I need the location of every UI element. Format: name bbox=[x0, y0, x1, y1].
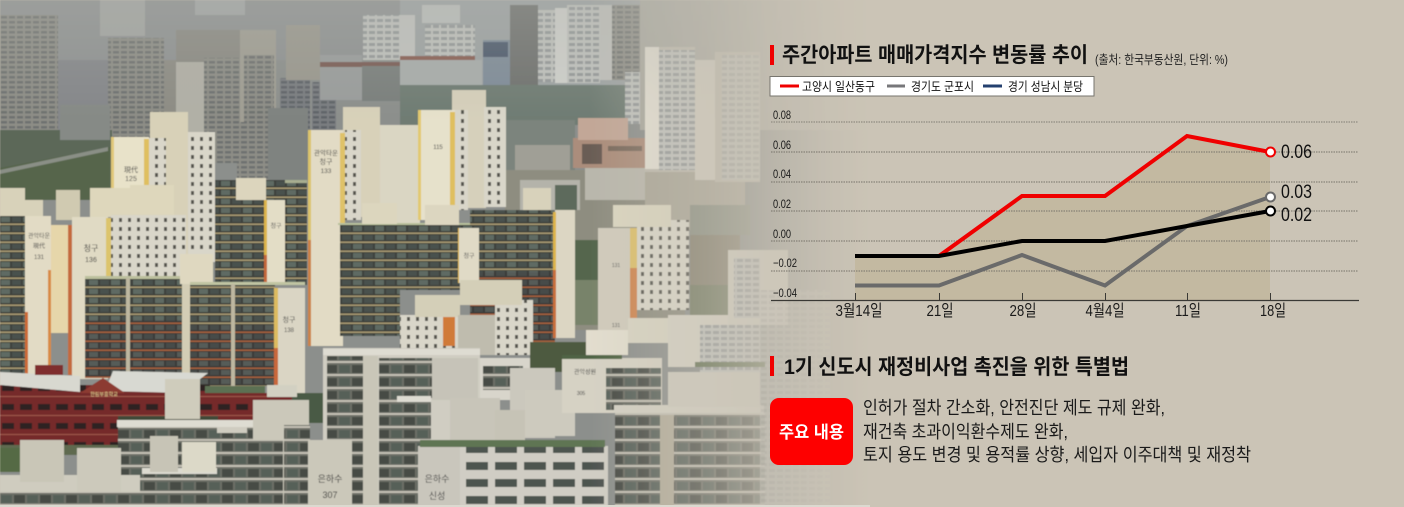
cream tower block 133: 133 bbox=[321, 168, 332, 175]
tower block 131: 131 bbox=[612, 323, 620, 329]
x axis bbox=[771, 293, 1359, 300]
x axis labels: 11일 bbox=[1175, 302, 1201, 320]
foreground low-rise second row bbox=[141, 436, 253, 507]
x axis labels: 18일 bbox=[1260, 302, 1286, 320]
tower groups with balconies left: 現代 bbox=[33, 242, 45, 250]
y axis labels: 0.04 bbox=[773, 167, 791, 181]
y axis labels bbox=[773, 108, 797, 300]
end value labels: 0.06 bbox=[1281, 142, 1312, 163]
x axis labels: 3월14일 bbox=[836, 302, 882, 320]
text block: key contents: 재건축 초과이익환수제도 완화, bbox=[863, 422, 1068, 442]
y axis labels: 0.00 bbox=[773, 227, 791, 241]
balcony block top centre bbox=[215, 178, 307, 285]
callout: key contents badge: 주요 내용 bbox=[779, 423, 844, 442]
balcony slab 85-185 bbox=[85, 254, 213, 380]
tower groups with balconies left: 관악타운 bbox=[28, 232, 51, 240]
balcony slab 190-305: 138 bbox=[284, 328, 295, 334]
balcony block with side wall: 청구 bbox=[463, 253, 475, 260]
mid cream towers left: 現代 bbox=[124, 165, 138, 174]
y axis labels: 0.08 bbox=[773, 108, 791, 122]
chart legend: 경기도 군포시 bbox=[911, 80, 974, 94]
foreground low-rise left: 은하수 bbox=[318, 474, 342, 484]
end marker gray bbox=[1266, 192, 1275, 202]
tall block right foreground bbox=[292, 348, 480, 507]
chart area fill bbox=[855, 136, 1270, 300]
end marker black bbox=[1266, 206, 1275, 216]
foreground block with name: 은하수 bbox=[425, 474, 449, 484]
foreground block 305: 305 bbox=[577, 391, 585, 397]
balcony slab 190-305: 청구 bbox=[283, 316, 296, 324]
mid cream towers left bbox=[111, 108, 308, 262]
faded right towers bbox=[645, 47, 760, 182]
small white cluster with orange panel bbox=[400, 280, 600, 372]
distant skyline towers bbox=[0, 0, 402, 168]
red brick school bbox=[0, 365, 295, 455]
cream tower block 133 bbox=[308, 107, 420, 346]
green hillside and haze bbox=[0, 85, 750, 330]
y axis labels: −0.04 bbox=[773, 286, 797, 300]
x axis labels: 4월4일 bbox=[1086, 302, 1124, 320]
heading: weekly apartment price chart: 주간아파트 매매가격지수 변동률 추이 bbox=[782, 44, 1088, 67]
series: Goyang Ilsan-dong (red) bbox=[939, 136, 1270, 256]
text block: key contents: 토지 용도 변경 및 용적률 상향, 세입자 이주대책 및 재정착 bbox=[863, 445, 1251, 465]
x axis labels: 28일 bbox=[1010, 302, 1036, 320]
mid cream towers left: 125 bbox=[125, 176, 137, 183]
foreground block with name: 신성 bbox=[429, 491, 445, 501]
distant skyline towers right bbox=[400, 0, 870, 130]
tower groups with balconies left: 131 bbox=[34, 255, 45, 261]
cream tower block 133: 관악타운 bbox=[314, 148, 338, 157]
line chart: weekly price change bbox=[771, 108, 1359, 320]
tower block 131: 131 bbox=[612, 263, 620, 269]
centre tower balconies bbox=[397, 358, 575, 507]
series: Bundang (black) bbox=[855, 211, 1270, 256]
balcony block top centre: 청구 bbox=[270, 223, 282, 230]
tan building bbox=[573, 118, 645, 168]
foreground block 305 bbox=[562, 318, 668, 413]
cream tower block 133: 청구 bbox=[320, 158, 333, 166]
y axis labels: 0.06 bbox=[773, 138, 791, 152]
tower block 131 bbox=[598, 205, 689, 330]
end value labels bbox=[1281, 142, 1312, 226]
heading: special act: 1기 신도시 재정비사업 촉진을 위한 특별법 bbox=[784, 356, 1129, 379]
balcony slab 190-305 bbox=[190, 282, 305, 393]
y axis labels: −0.02 bbox=[773, 256, 797, 270]
haze overlay bbox=[0, 0, 870, 120]
chart legend: 경기 성남시 분당 bbox=[1008, 80, 1083, 94]
callout: key contents badge bbox=[770, 398, 853, 465]
tower 136 bbox=[72, 185, 186, 379]
chart legend: 고양시 일산동구 bbox=[802, 80, 875, 94]
foreground low-rise left: 307 bbox=[322, 490, 338, 500]
tower block 115: 115 bbox=[433, 145, 443, 151]
balcony block with side wall bbox=[400, 188, 575, 342]
text block: key contents: 인허가 절차 간소화, 안전진단 제도 규제 완화, bbox=[863, 398, 1165, 418]
end marker red bbox=[1266, 148, 1275, 156]
text block: key contents bbox=[863, 398, 1251, 465]
tower 136: 136 bbox=[85, 257, 97, 264]
tower block 115 bbox=[418, 90, 506, 220]
fade into beige panel bbox=[590, 0, 870, 507]
y axis labels: 0.02 bbox=[773, 197, 791, 211]
foreground block with name bbox=[418, 440, 608, 507]
x axis labels: 21일 bbox=[926, 302, 954, 320]
tower 136: 청구 bbox=[84, 244, 98, 253]
chart legend bbox=[770, 76, 1094, 96]
tower groups with balconies left bbox=[0, 188, 80, 375]
foreground right block bbox=[614, 250, 830, 507]
series: Gunpo (gray) bbox=[855, 197, 1270, 286]
photo: apartment complex skyline bbox=[0, 0, 870, 507]
foreground rooftops far left bbox=[0, 440, 140, 507]
foreground low-rise left bbox=[117, 379, 352, 507]
heading: weekly apartment price chart: (출처: 한국부동산원, 단위: %) bbox=[1095, 53, 1228, 67]
x axis labels bbox=[836, 302, 1286, 320]
red brick school: 한림부흥학교 bbox=[90, 391, 118, 398]
balcony block right of 133 bbox=[338, 203, 400, 336]
foreground block 305: 관악성원 bbox=[574, 368, 596, 376]
end value labels: 0.03 bbox=[1281, 182, 1312, 203]
end value labels: 0.02 bbox=[1281, 205, 1312, 226]
